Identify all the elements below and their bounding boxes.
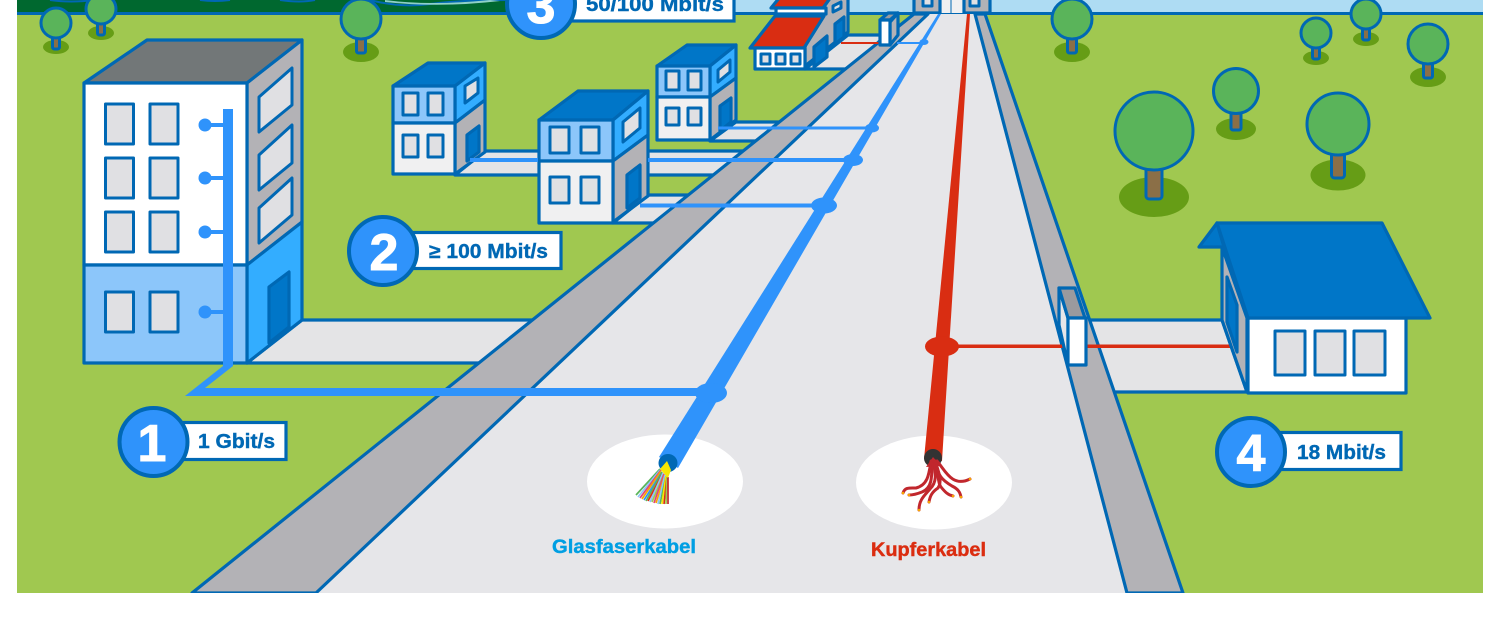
badge 2: ≥ 100 Mbit/s: ≥ 100 Mbit/s <box>429 241 548 263</box>
badge 3: 50/100 Mbit/s <box>507 0 734 38</box>
copper house connection <box>942 344 1230 348</box>
badge 1: 1 Gbit/s <box>120 408 286 476</box>
main fiber cable <box>659 14 941 468</box>
label: Kupferkabel: Kupferkabel <box>871 540 986 561</box>
trees: left group <box>41 0 381 62</box>
white spot: copper cable <box>856 436 1012 530</box>
building 2: blue and white house <box>393 63 485 174</box>
driveways <box>247 35 1247 392</box>
background: sky <box>510 0 1483 13</box>
building 4: blue and white house <box>657 45 736 140</box>
badge 1: 1 Gbit/s: 1 <box>138 415 166 473</box>
fiber connection lines <box>185 43 924 396</box>
main copper cable <box>924 14 970 461</box>
right sidewalk <box>975 14 1183 593</box>
building 1: office tower <box>84 40 302 363</box>
horizon line <box>17 12 1483 15</box>
white spot: fiber cable <box>587 434 743 528</box>
badge 2: ≥ 100 Mbit/s: 2 <box>370 224 398 282</box>
badge 4: 18 Mbit/s: 4 <box>1237 425 1266 483</box>
red house copper connection <box>841 42 881 44</box>
trees: right group <box>1052 0 1448 217</box>
icon: fiber strands <box>636 454 678 504</box>
building: distant houses at road end <box>914 0 990 13</box>
badge 4: 18 Mbit/s: 18 Mbit/s <box>1297 442 1386 464</box>
road <box>316 14 1127 593</box>
distribution box: far <box>880 13 898 45</box>
label: Glasfaserkabel: Glasfaserkabel <box>552 537 696 558</box>
distribution box: near <box>1059 288 1086 365</box>
background: dark green hills <box>17 0 512 13</box>
building 3: blue and white house <box>539 91 648 223</box>
building 6: right blue roof house <box>1199 223 1430 393</box>
badge 1: 1 Gbit/s: 1 Gbit/s <box>198 431 275 453</box>
badge 4: 18 Mbit/s <box>1217 418 1401 486</box>
left sidewalk <box>192 14 928 593</box>
building 5: red roof house <box>750 0 848 69</box>
badge 2: ≥ 100 Mbit/s <box>349 217 561 285</box>
icon: copper wires <box>902 449 971 511</box>
